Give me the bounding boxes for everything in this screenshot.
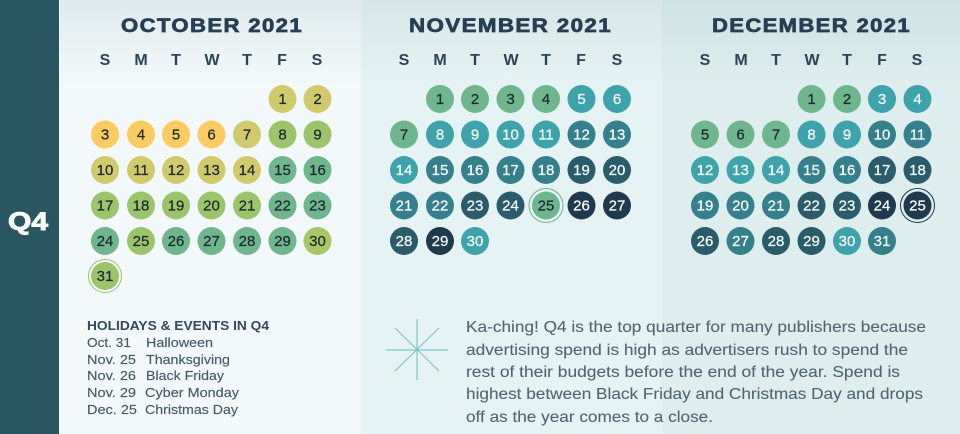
weekday labels: December: T xyxy=(842,52,852,69)
calendar: November days xyxy=(390,85,631,255)
text block: holidays and events: Black Friday xyxy=(146,368,225,383)
calendar: October days: 3 xyxy=(101,126,109,144)
calendar: October days: 14 xyxy=(239,162,255,179)
calendar: November days: 15 xyxy=(432,162,448,179)
calendar: October days: 22 xyxy=(274,198,291,214)
calendar: November days: 9 xyxy=(471,126,479,144)
calendar: October days: 21 xyxy=(239,198,255,214)
calendar: November days: 3 xyxy=(506,91,515,108)
text block: holidays and events: HOLIDAYS & EVENTS IN Q4 xyxy=(87,319,269,333)
calendar: December days: 12 xyxy=(697,162,713,179)
weekday labels: November xyxy=(399,52,623,69)
highlighted day: December 25 Christmas xyxy=(900,188,934,222)
calendar: October days: 28 xyxy=(239,233,255,250)
panel: december background xyxy=(662,0,960,434)
calendar: December days: 22 xyxy=(803,198,820,214)
sidebar: Q4 label xyxy=(0,0,59,434)
calendar: October days: 18 xyxy=(133,198,149,214)
calendar: November days: 24 xyxy=(502,198,519,214)
weekday labels: December: S xyxy=(912,52,923,69)
calendar: December days: 23 xyxy=(839,198,855,214)
calendar: December days: 21 xyxy=(768,198,784,214)
calendar: November days: 20 xyxy=(609,162,625,179)
calendar: November days: 28 xyxy=(396,233,412,250)
highlighted day: November 25 Thanksgiving: 25 xyxy=(538,198,554,214)
calendar: November days: 8 xyxy=(436,126,444,144)
text block: holidays and events: Cyber Monday xyxy=(145,385,240,400)
calendar: December days: 10 xyxy=(874,126,890,144)
calendar: November days: 5 xyxy=(577,91,586,108)
calendar: October days: 2 xyxy=(313,91,322,108)
calendar: December days: 4 xyxy=(913,91,922,108)
text block: Q4 description: Ka-ching! Q4 is the top quarter for many publishers because xyxy=(466,319,926,336)
calendar: October days: 23 xyxy=(309,198,326,214)
calendar: October days: 16 xyxy=(309,162,326,179)
weekday labels: October: F xyxy=(277,52,287,69)
weekday labels: December: T xyxy=(771,52,781,69)
text block: holidays and events: Nov. 26 xyxy=(87,368,136,383)
calendar: November days: 27 xyxy=(609,198,625,214)
text block: holidays and events: Halloween xyxy=(146,335,213,350)
heading: December 2021: DECEMBER 2021 xyxy=(712,15,911,37)
calendar: October days: 27 xyxy=(203,233,220,250)
text block: holidays and events: Nov. 29 xyxy=(87,385,136,400)
calendar: November days: 29 xyxy=(432,233,448,250)
calendar: December days: 6 xyxy=(736,126,745,144)
weekday labels: October: S xyxy=(312,52,323,69)
weekday labels: November: M xyxy=(433,52,447,69)
highlighted day: November 25 Thanksgiving xyxy=(529,188,563,222)
calendar: November days: 2 xyxy=(471,91,479,108)
calendar: November days: 22 xyxy=(432,198,448,214)
calendar: November days: 7 xyxy=(400,126,408,144)
weekday labels: November: W xyxy=(503,52,519,69)
weekday labels: November: T xyxy=(541,52,551,69)
calendar: October days: 17 xyxy=(97,198,113,214)
calendar: November days: 4 xyxy=(542,91,550,108)
text block: Q4 description: highest between Black Friday and Christmas Day and drops xyxy=(466,386,923,403)
calendar: November days: 13 xyxy=(609,126,625,144)
calendar: October days: 8 xyxy=(278,126,287,144)
calendar: October days: 7 xyxy=(243,126,251,144)
calendar: November days: 1 xyxy=(436,91,444,108)
calendar: October days: 19 xyxy=(168,198,184,214)
calendar: October days: 5 xyxy=(172,126,180,144)
text block: holidays and events: Nov. 25 xyxy=(87,352,136,367)
calendar: December days: 7 xyxy=(772,126,780,144)
calendar: December days: 24 xyxy=(874,198,890,214)
calendar: December days: 20 xyxy=(732,198,749,214)
calendar: December days: 31 xyxy=(874,233,890,250)
calendar: November days: 23 xyxy=(467,198,483,214)
text block: Q4 description: advertising spend is high as advertisers rush to spend the xyxy=(466,342,908,359)
calendar: October days: 25 xyxy=(133,233,149,250)
panel: october background xyxy=(60,0,361,434)
calendar: December days: 3 xyxy=(878,91,886,108)
weekday labels: November: S xyxy=(399,52,410,69)
text block: holidays and events: Oct. 31 xyxy=(87,335,131,350)
weekday labels: December: F xyxy=(877,52,887,69)
weekday labels: October: W xyxy=(204,52,220,69)
calendar: December days: 1 xyxy=(807,91,816,108)
calendar: October days: 26 xyxy=(168,233,184,250)
calendar: December days: 13 xyxy=(732,162,749,179)
highlighted day: December 25 Christmas: 25 xyxy=(909,198,926,214)
text block: Q4 description xyxy=(466,319,926,426)
text block: holidays and events xyxy=(87,319,269,417)
highlighted day: October 31 Halloween: 31 xyxy=(97,268,113,285)
calendar: November days: 12 xyxy=(573,126,590,144)
highlighted day: October 31 Halloween xyxy=(88,260,122,292)
weekday labels: December: M xyxy=(734,52,748,69)
calendar: November days: 18 xyxy=(538,162,554,179)
calendar: October days: 24 xyxy=(97,233,113,250)
text block: holidays and events: Dec. 25 xyxy=(87,402,137,417)
weekday labels: November: T xyxy=(470,52,480,69)
calendar: November days: 11 xyxy=(538,126,554,144)
calendar: October days: 13 xyxy=(203,162,220,179)
calendar: December days: 19 xyxy=(697,198,713,214)
calendar: October days: 9 xyxy=(313,126,322,144)
text block: holidays and events: Thanksgiving xyxy=(146,352,230,367)
calendar: November days: 10 xyxy=(502,126,519,144)
calendar: November days: 21 xyxy=(396,198,412,214)
calendar: November days: 16 xyxy=(467,162,483,179)
weekday labels: November: S xyxy=(612,52,623,69)
weekday labels: October: S xyxy=(100,52,111,69)
weekday labels: October xyxy=(100,52,323,69)
weekday labels: October: T xyxy=(171,52,181,69)
calendar: December days: 28 xyxy=(768,233,784,250)
weekday labels: October: T xyxy=(242,52,252,69)
calendar: October days: 1 xyxy=(278,91,287,108)
text block: Q4 description: rest of their budgets before the end of the year. Spend is xyxy=(466,364,900,381)
calendar: November days: 17 xyxy=(502,162,519,179)
weekday labels: October: M xyxy=(134,52,148,69)
weekday labels: December xyxy=(700,52,923,69)
calendar: December days: 8 xyxy=(807,126,816,144)
weekday labels: November: F xyxy=(576,52,586,69)
calendar: December days: 16 xyxy=(839,162,855,179)
calendar: December days: 29 xyxy=(803,233,820,250)
text block: Q4 description: off as the year comes to a close. xyxy=(466,409,713,426)
weekday labels: December: S xyxy=(700,52,711,69)
weekday labels: December: W xyxy=(804,52,820,69)
calendar: November days: 26 xyxy=(573,198,590,214)
calendar: October days: 11 xyxy=(133,162,149,179)
calendar: December days: 14 xyxy=(768,162,784,179)
calendar: October days: 29 xyxy=(274,233,291,250)
heading: November 2021: NOVEMBER 2021 xyxy=(409,15,612,37)
icon: starburst xyxy=(386,319,448,380)
calendar: December days xyxy=(691,85,934,255)
panel: november background xyxy=(361,0,662,434)
calendar: December days: 9 xyxy=(843,126,851,144)
calendar: October days xyxy=(88,85,332,292)
calendar: December days: 18 xyxy=(909,162,926,179)
calendar: November days: 14 xyxy=(396,162,412,179)
calendar: December days: 27 xyxy=(732,233,749,250)
heading: October 2021: OCTOBER 2021 xyxy=(121,15,303,37)
calendar: December days: 5 xyxy=(701,126,709,144)
calendar: October days: 6 xyxy=(207,126,216,144)
calendar: October days: 30 xyxy=(309,233,326,250)
text block: holidays and events: Christmas Day xyxy=(145,402,239,417)
calendar: December days: 26 xyxy=(697,233,713,250)
calendar: October days: 20 xyxy=(203,198,220,214)
calendar: December days: 2 xyxy=(843,91,851,108)
calendar: December days: 17 xyxy=(874,162,890,179)
calendar: October days: 12 xyxy=(168,162,184,179)
calendar: December days: 11 xyxy=(910,126,925,144)
calendar: November days: 30 xyxy=(467,233,483,250)
calendar: October days: 10 xyxy=(97,162,113,179)
calendar: October days: 15 xyxy=(274,162,291,179)
sidebar: Q4 label: Q4 xyxy=(8,208,48,236)
calendar: December days: 15 xyxy=(803,162,820,179)
calendar: December days: 30 xyxy=(839,233,855,250)
calendar: November days: 19 xyxy=(573,162,590,179)
calendar: October days: 4 xyxy=(137,126,145,144)
calendar: November days: 6 xyxy=(613,91,621,108)
